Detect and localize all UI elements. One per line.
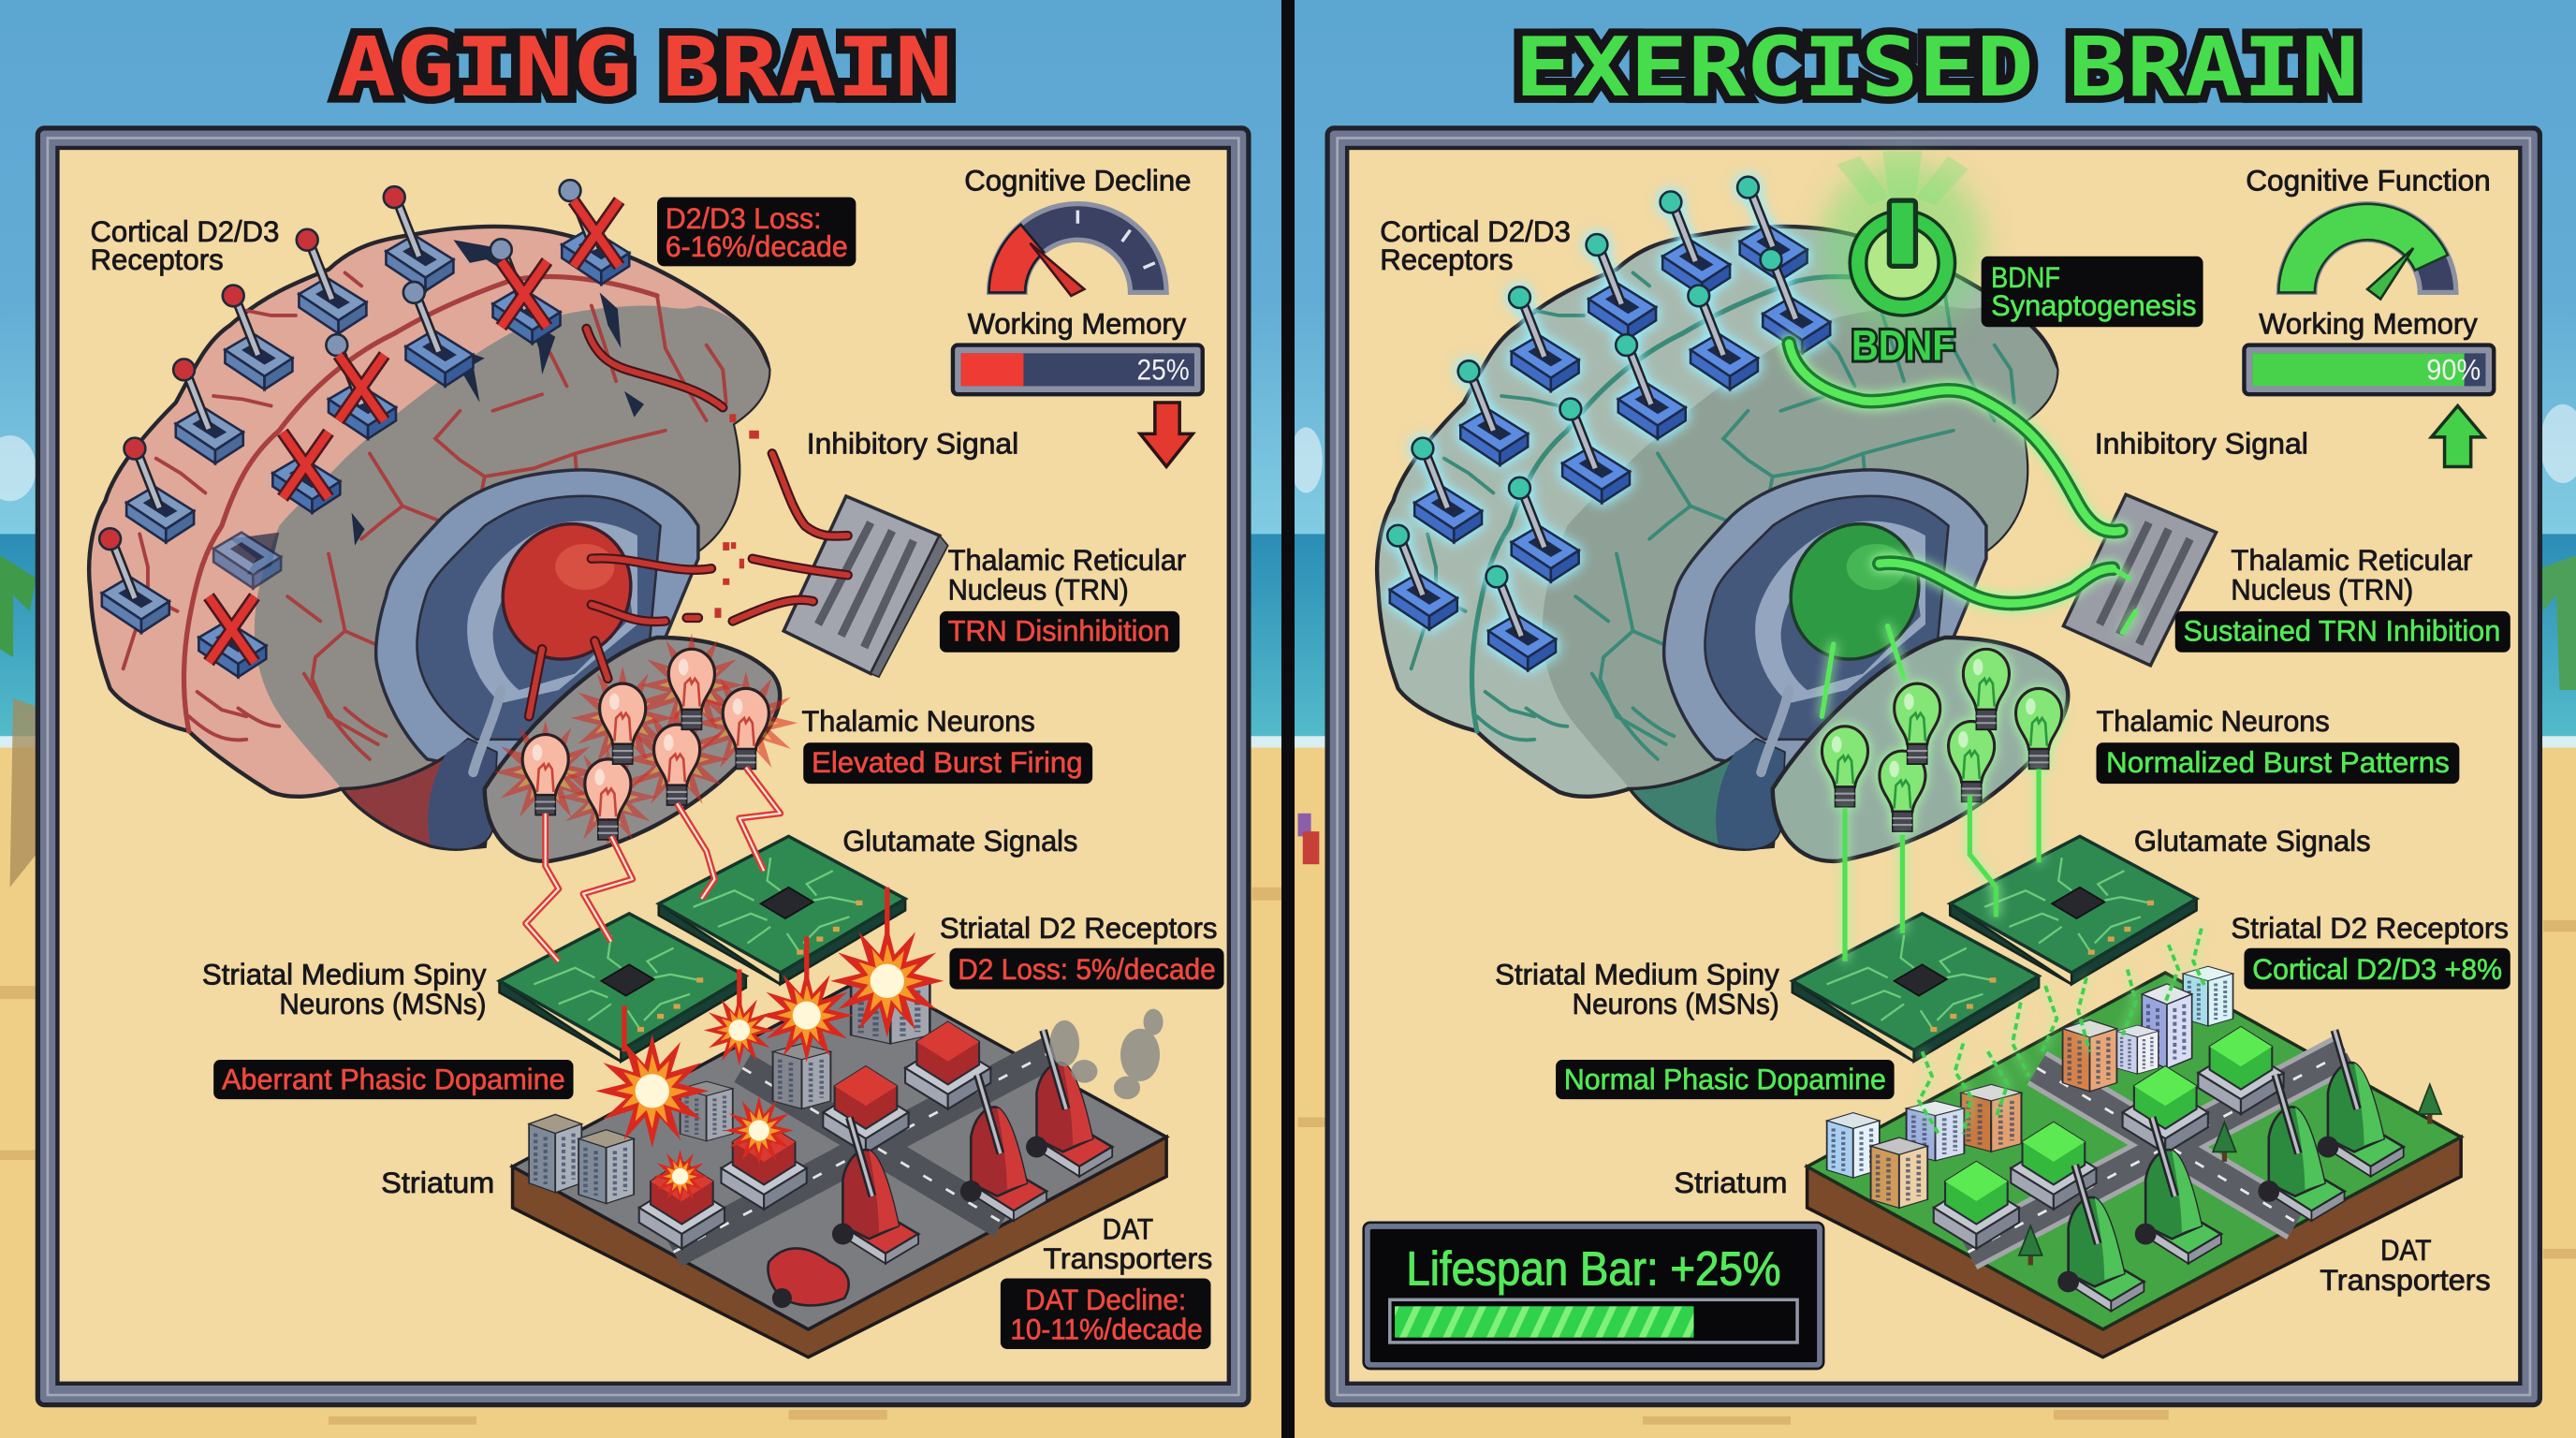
label: TRN: Thalamic Reticular [948,543,1186,577]
label: DAT: Transporters [1043,1241,1212,1275]
tag: cortical D2/D3 gain: Cortical D2/D3 +8% [2252,952,2502,986]
label: DAT: DAT [2380,1233,2432,1267]
title: exercised brain [1515,20,2359,115]
chip: MSN [500,914,746,1062]
tag: normal dopamine: Normal Phasic Dopamine [1564,1063,1886,1096]
lifespan bar: Lifespan Bar: +25% [1406,1241,1781,1295]
label: working memory: Working Memory [2259,306,2478,340]
label: TRN [2231,543,2472,607]
center divider [1281,0,1295,1438]
label: DAT: Transporters [2320,1263,2491,1297]
tag: D2/D3 loss: D2/D3 Loss: [666,201,822,235]
lifespan bar [1364,1223,1823,1369]
label: glutamate signals: Glutamate Signals [842,824,1077,858]
label: DAT: DAT [1103,1211,1153,1245]
label: cortical receptors: Cortical D2/D3 [91,214,279,248]
bar: working memory 90% [2244,345,2494,394]
bar: working memory 90%: 90% [2426,352,2481,386]
bar: working memory 25%: 25% [1137,352,1190,386]
label: cognitive function: Cognitive Function [2246,164,2491,198]
label: MSNs: Neurons (MSNs) [279,987,487,1020]
label: working memory: Working Memory [968,306,1186,340]
brain: aging [89,227,780,861]
dopamine: normal release [1919,929,2204,1134]
glowing inhibitory wires [1789,344,2136,716]
label: cortical receptors [1380,214,1571,276]
tag: DAT decline: DAT Decline: [1025,1283,1186,1316]
label: cortical receptors [91,214,279,276]
label: striatum: Striatum [1674,1166,1788,1199]
tag: elevated burst firing: Elevated Burst Firing [812,745,1083,779]
tag: normalized burst patterns: Normalized Burst Patterns [2106,745,2450,779]
chip: MSN [1793,914,2039,1062]
panel: exercised brain [1327,128,2539,1405]
receptors: healthy glowing switches [1387,177,1830,670]
label: BDNF: BDNF [1852,321,1955,369]
tag: DAT decline [1001,1278,1211,1349]
tag: aberrant dopamine: Aberrant Phasic Dopamine [222,1063,565,1096]
label: TRN [948,543,1186,607]
thalamic neurons: bursting bulbs [493,634,798,846]
title: exercised brain: EXERCISED [1515,20,2034,115]
tag: BDNF synaptogenesis [1982,257,2203,327]
tag: BDNF synaptogenesis: Synaptogenesis [1991,288,2197,322]
arrow: up [2432,406,2484,466]
striatum: healthy city platform [1808,966,2461,1357]
label: MSNs [202,957,487,1020]
label: striatum: Striatum [381,1166,494,1199]
label: MSNs: Neurons (MSNs) [1573,987,1779,1020]
title: exercised brain: BRAIN [2069,20,2359,115]
thalamus: green [1767,501,1942,682]
label: inhibitory signal: Inhibitory Signal [2095,426,2308,460]
tag: BDNF synaptogenesis: BDNF [1991,260,2060,294]
receptors: damaged switches [99,186,453,633]
title: aging brain: BRAIN [662,20,953,115]
gauge: cognitive decline [989,204,1166,296]
striatum: damaged city platform [513,974,1166,1357]
label: cognitive decline: Cognitive Decline [964,164,1191,198]
label: thalamic neurons: Thalamic Neurons [2097,704,2330,738]
red x marks [209,200,620,662]
label: TRN: Nucleus (TRN) [2231,573,2413,607]
label: glutamate signals: Glutamate Signals [2134,824,2371,858]
thalamic neurons: glowing bulbs [1822,649,2062,831]
arrow: down [1140,403,1193,466]
glutamate lightning [526,768,781,961]
label: MSNs: Striatal Medium Spiny [1495,957,1779,990]
tag: D2 loss: D2 Loss: 5%/decade [958,952,1216,986]
tag: D2/D3 loss [657,198,856,266]
label: striatal D2: Striatal D2 Receptors [2231,911,2509,945]
glutamate signal lines [1845,769,2039,961]
broken inhibitory wires [529,329,848,716]
chip: glutamate [659,836,905,984]
TRN block [783,496,948,677]
label: TRN: Thalamic Reticular [2231,543,2472,577]
label: TRN: Nucleus (TRN) [948,573,1129,607]
label: striatal D2: Striatal D2 Receptors [940,911,1218,945]
title: aging brain [337,20,953,115]
panel: aging brain [37,128,1249,1405]
chip: glutamate [1950,836,2197,984]
gauge: cognitive function [2278,204,2456,299]
label: inhibitory signal: Inhibitory Signal [807,426,1018,460]
title: aging brain: AGING [337,20,633,115]
tag: TRN disinhibition: TRN Disinhibition [948,613,1170,647]
explosions: aberrant dopamine [595,888,944,1204]
tag: sustained TRN inhibition: Sustained TRN Inhibition [2184,613,2500,647]
label: DAT [2320,1233,2491,1297]
cracks [230,240,644,575]
label: MSNs [1495,957,1779,1020]
icon: BDNF power [1821,151,1984,332]
label: DAT [1043,1211,1212,1275]
bar: working memory 25% [953,345,1203,394]
label: cortical receptors: Receptors [1380,242,1513,276]
tag: D2/D3 loss: 6-16%/decade [666,229,848,263]
label: MSNs: Striatal Medium Spiny [202,957,487,990]
tag: DAT decline: 10-11%/decade [1010,1312,1203,1345]
thalamus: red [479,501,654,682]
label: cortical receptors: Cortical D2/D3 [1380,214,1571,248]
label: thalamic neurons: Thalamic Neurons [801,704,1035,738]
brain: exercised [1377,227,2068,861]
TRN block [2063,494,2217,666]
label: cortical receptors: Receptors [91,242,224,276]
